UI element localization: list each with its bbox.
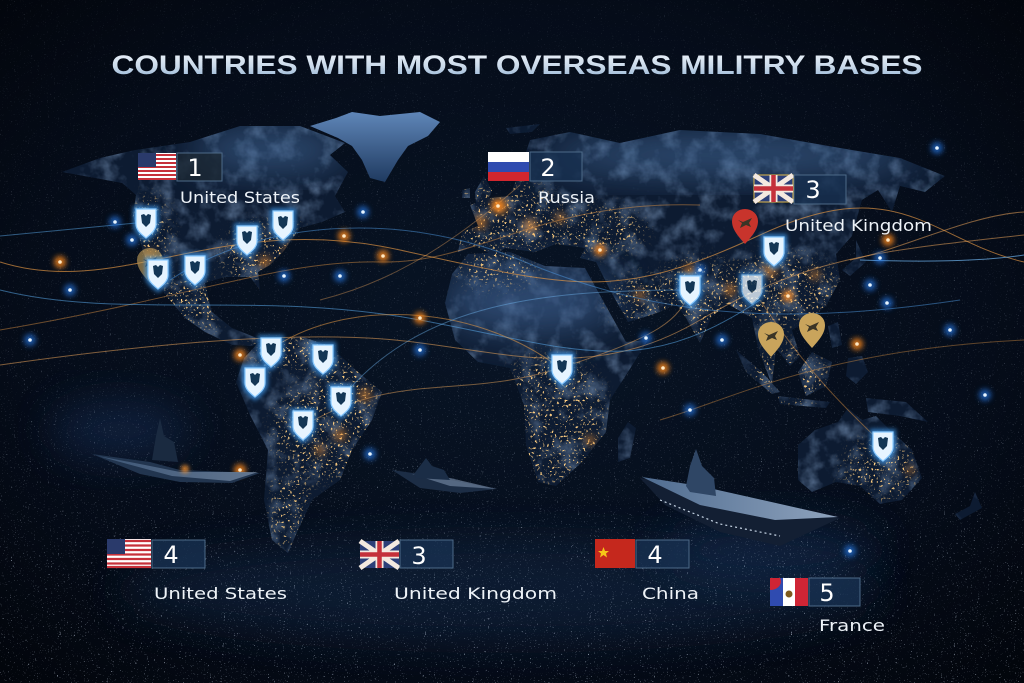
Greenland bbox=[310, 112, 440, 182]
map entry: Russia rank 2: 2 bbox=[540, 154, 556, 182]
map entry: United Kingdom rank 3: United Kingdom bbox=[785, 216, 932, 235]
flag: United Kingdom bbox=[754, 175, 793, 202]
legend entry: France 5 bbox=[770, 578, 885, 635]
network nodes bbox=[24, 142, 991, 557]
connection arcs bbox=[0, 185, 1024, 445]
legend entry: United States 4: United States bbox=[154, 584, 287, 603]
world map bbox=[62, 112, 982, 553]
ship: left carrier bbox=[92, 418, 260, 483]
base markers: shields bbox=[133, 206, 896, 465]
base markers: gold pins bbox=[137, 248, 825, 357]
legend entry: France 5: 5 bbox=[819, 579, 835, 607]
flag: Russia bbox=[488, 152, 529, 181]
flag: China bbox=[595, 539, 635, 568]
legend entry: China 4: 4 bbox=[647, 541, 663, 569]
base marker: red pin bbox=[732, 209, 758, 244]
legend entry: United States 4 bbox=[107, 539, 287, 603]
legend entry: United Kingdom 3: 3 bbox=[411, 542, 427, 570]
flag: United States bbox=[138, 153, 176, 180]
legend entry: China 4 bbox=[595, 539, 699, 603]
ship: middle vessel bbox=[392, 458, 497, 493]
map entry: United Kingdom rank 3: 3 bbox=[805, 176, 821, 204]
flag: France bbox=[770, 578, 808, 606]
title: COUNTRIES WITH MOST OVERSEAS MILITRY BASES bbox=[112, 50, 922, 80]
map entry: United States rank 1: United States bbox=[180, 188, 300, 207]
legend entry: United Kingdom 3 bbox=[360, 540, 557, 603]
city lights bbox=[133, 178, 920, 551]
map entry: Russia rank 2 bbox=[488, 152, 595, 207]
flag: United Kingdom bbox=[360, 541, 399, 568]
ship: right carrier bbox=[640, 449, 840, 546]
map entry: United Kingdom rank 3 bbox=[754, 175, 932, 235]
legend entry: China 4: China bbox=[642, 584, 699, 603]
landmasses bbox=[62, 124, 982, 553]
map entry: Russia rank 2: Russia bbox=[538, 188, 595, 207]
legend entry: United States 4: 4 bbox=[163, 541, 179, 569]
land texture bbox=[65, 124, 978, 553]
legend entry: France 5: France bbox=[819, 616, 885, 635]
flag: United States bbox=[107, 539, 151, 568]
map entry: United States rank 1: 1 bbox=[187, 154, 203, 182]
legend entry: United Kingdom 3: United Kingdom bbox=[394, 584, 557, 603]
map entry: United States rank 1 bbox=[138, 153, 300, 207]
